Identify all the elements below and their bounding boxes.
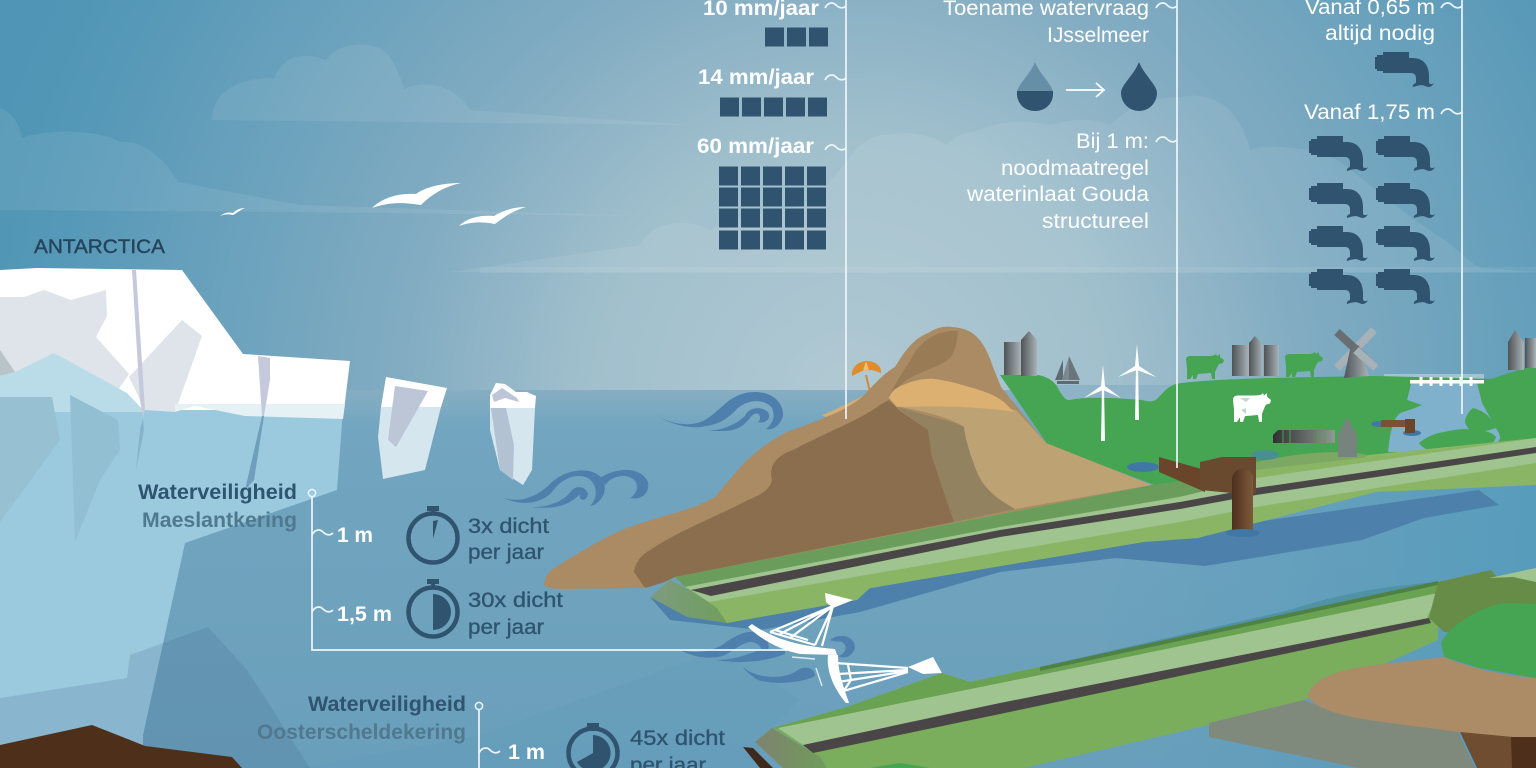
Oosterscheldekering heading [257,693,466,744]
vertical guide line dune [825,0,846,419]
squares 3 [765,28,828,46]
underwater ice [0,410,343,768]
water line strip [175,404,345,419]
cow green 1 [1186,354,1224,379]
birds [220,183,526,226]
Oosterscheldekering heading: Oosterscheldekering [257,721,466,744]
green land [1000,365,1536,490]
ice above water [0,268,350,410]
text 3x dicht: 3x dicht [468,515,549,538]
water inlet text: Bij 1 m: [1076,130,1149,153]
dune erosion text 60 mm: 60 mm/jaar [697,135,814,158]
dike head [755,728,827,768]
cow green 2 [1285,352,1323,377]
squares grid [719,166,826,250]
water inlet text: waterinlaat Gouda [966,183,1149,206]
cow white [1233,393,1271,422]
slope mid [895,406,1015,522]
lower dike [743,568,1536,768]
iceberg 1 [378,377,447,479]
stopwatch 30x [408,579,458,636]
text 45x dicht [630,727,725,768]
river [1388,380,1501,452]
Oosterscheldekering heading: Waterveiligheid [308,693,466,716]
wave left bottom [502,470,648,508]
soil [1460,732,1513,768]
upper dike [650,438,1536,630]
lower sand [895,405,1152,509]
beach [822,392,883,424]
clouds [0,44,1536,273]
text 45x dicht: 45x dicht [630,727,725,750]
right bank [1477,365,1536,447]
upper green wedge [773,583,1438,729]
icon: full drop [1121,62,1157,111]
sailboat [1055,356,1080,384]
icons: eight pumps [1309,136,1435,304]
wave left top [654,392,783,431]
squares 5 [720,98,827,116]
upper sand [889,379,1014,412]
light band [778,593,1438,745]
stopwatch 45x [568,723,618,768]
skyline silos left [1004,331,1037,376]
dike body [773,583,1438,768]
lower ice shadow [0,627,310,768]
water inlet text: structureel [1042,210,1149,233]
Maeslantkering heading: Maeslantkering [142,509,297,532]
river top [1384,374,1484,386]
level 1 m lower: 1 m [508,741,545,764]
puddles [1127,462,1159,472]
umbrella [852,361,881,392]
outer dune [544,327,1152,589]
text 3x dicht [468,515,549,564]
arrow [1066,83,1104,97]
dune erosion text 14 mm: 14 mm/jaar [698,66,814,89]
text 3x dicht: per jaar [468,541,544,564]
vertical guide line water demand [1156,0,1177,468]
skyline silos right [1508,330,1536,370]
wind turbine right [1118,344,1156,420]
road [691,447,1536,596]
dune [544,327,1152,589]
lower dike shadow [1209,700,1475,768]
iceberg 2 [490,383,536,485]
Antarctica title: ANTARCTICA [34,237,165,258]
stopwatch 3x [408,506,458,562]
dike shadow [650,490,1499,630]
dark rock [743,747,773,768]
tan ground [1308,657,1536,737]
connector line Maeslantkering [308,489,830,650]
rock bottom left [0,725,242,768]
river islands [1419,429,1496,452]
sky background [0,0,1536,392]
Maeslantkering barrier [748,593,942,703]
inland lake [1056,385,1176,405]
Antarctic ice shelf [0,268,350,768]
icon: single pump [1375,52,1434,87]
vertical guide line pumps [1441,0,1462,414]
dark band [675,478,1205,587]
underwater ridges [0,397,60,522]
water demand text [943,0,1149,47]
Maeslantkering heading: Waterveiligheid [138,481,297,504]
river bridge [1410,377,1484,386]
right end block [1429,570,1536,640]
light path [685,438,1536,602]
sea [0,390,1536,768]
icon: half drop [1017,62,1053,111]
text 30x dicht: per jaar [468,616,544,639]
Maeslantkering wave [680,632,855,683]
cracks [132,270,145,418]
text 30x dicht [468,589,563,639]
connector line Oosterscheldekering [475,702,500,768]
church [1273,417,1357,457]
water inlet text: noodmaatregel [1001,157,1149,180]
windmill [1337,330,1376,378]
level 1,5 m: 1,5 m [337,603,392,626]
skyline silos middle [1232,336,1279,376]
big pump outlet [1159,457,1260,537]
pumps text 1.75: Vanaf 1,75 m [1304,101,1435,124]
inner dark dune [634,400,954,588]
water demand text: IJsselmeer [1047,24,1149,47]
text 30x dicht: 30x dicht [468,589,563,612]
level 1 m: 1 m [337,524,373,547]
berm [1256,438,1536,490]
dune ridge [889,331,958,398]
teal fringe [1000,582,1438,682]
dark edge [1040,581,1438,671]
pumps text 0.65 [1305,0,1435,45]
dike head [650,580,727,623]
green blob [1441,603,1536,678]
Maeslantkering heading [138,481,297,532]
water inlet text [966,130,1149,233]
wind turbine left [1084,365,1121,441]
small pump outlet [1381,419,1415,433]
road [803,618,1431,753]
bright patch [870,763,930,768]
dike green outer [675,438,1536,623]
pumps text 0.65: altijd nodig [1325,22,1435,45]
